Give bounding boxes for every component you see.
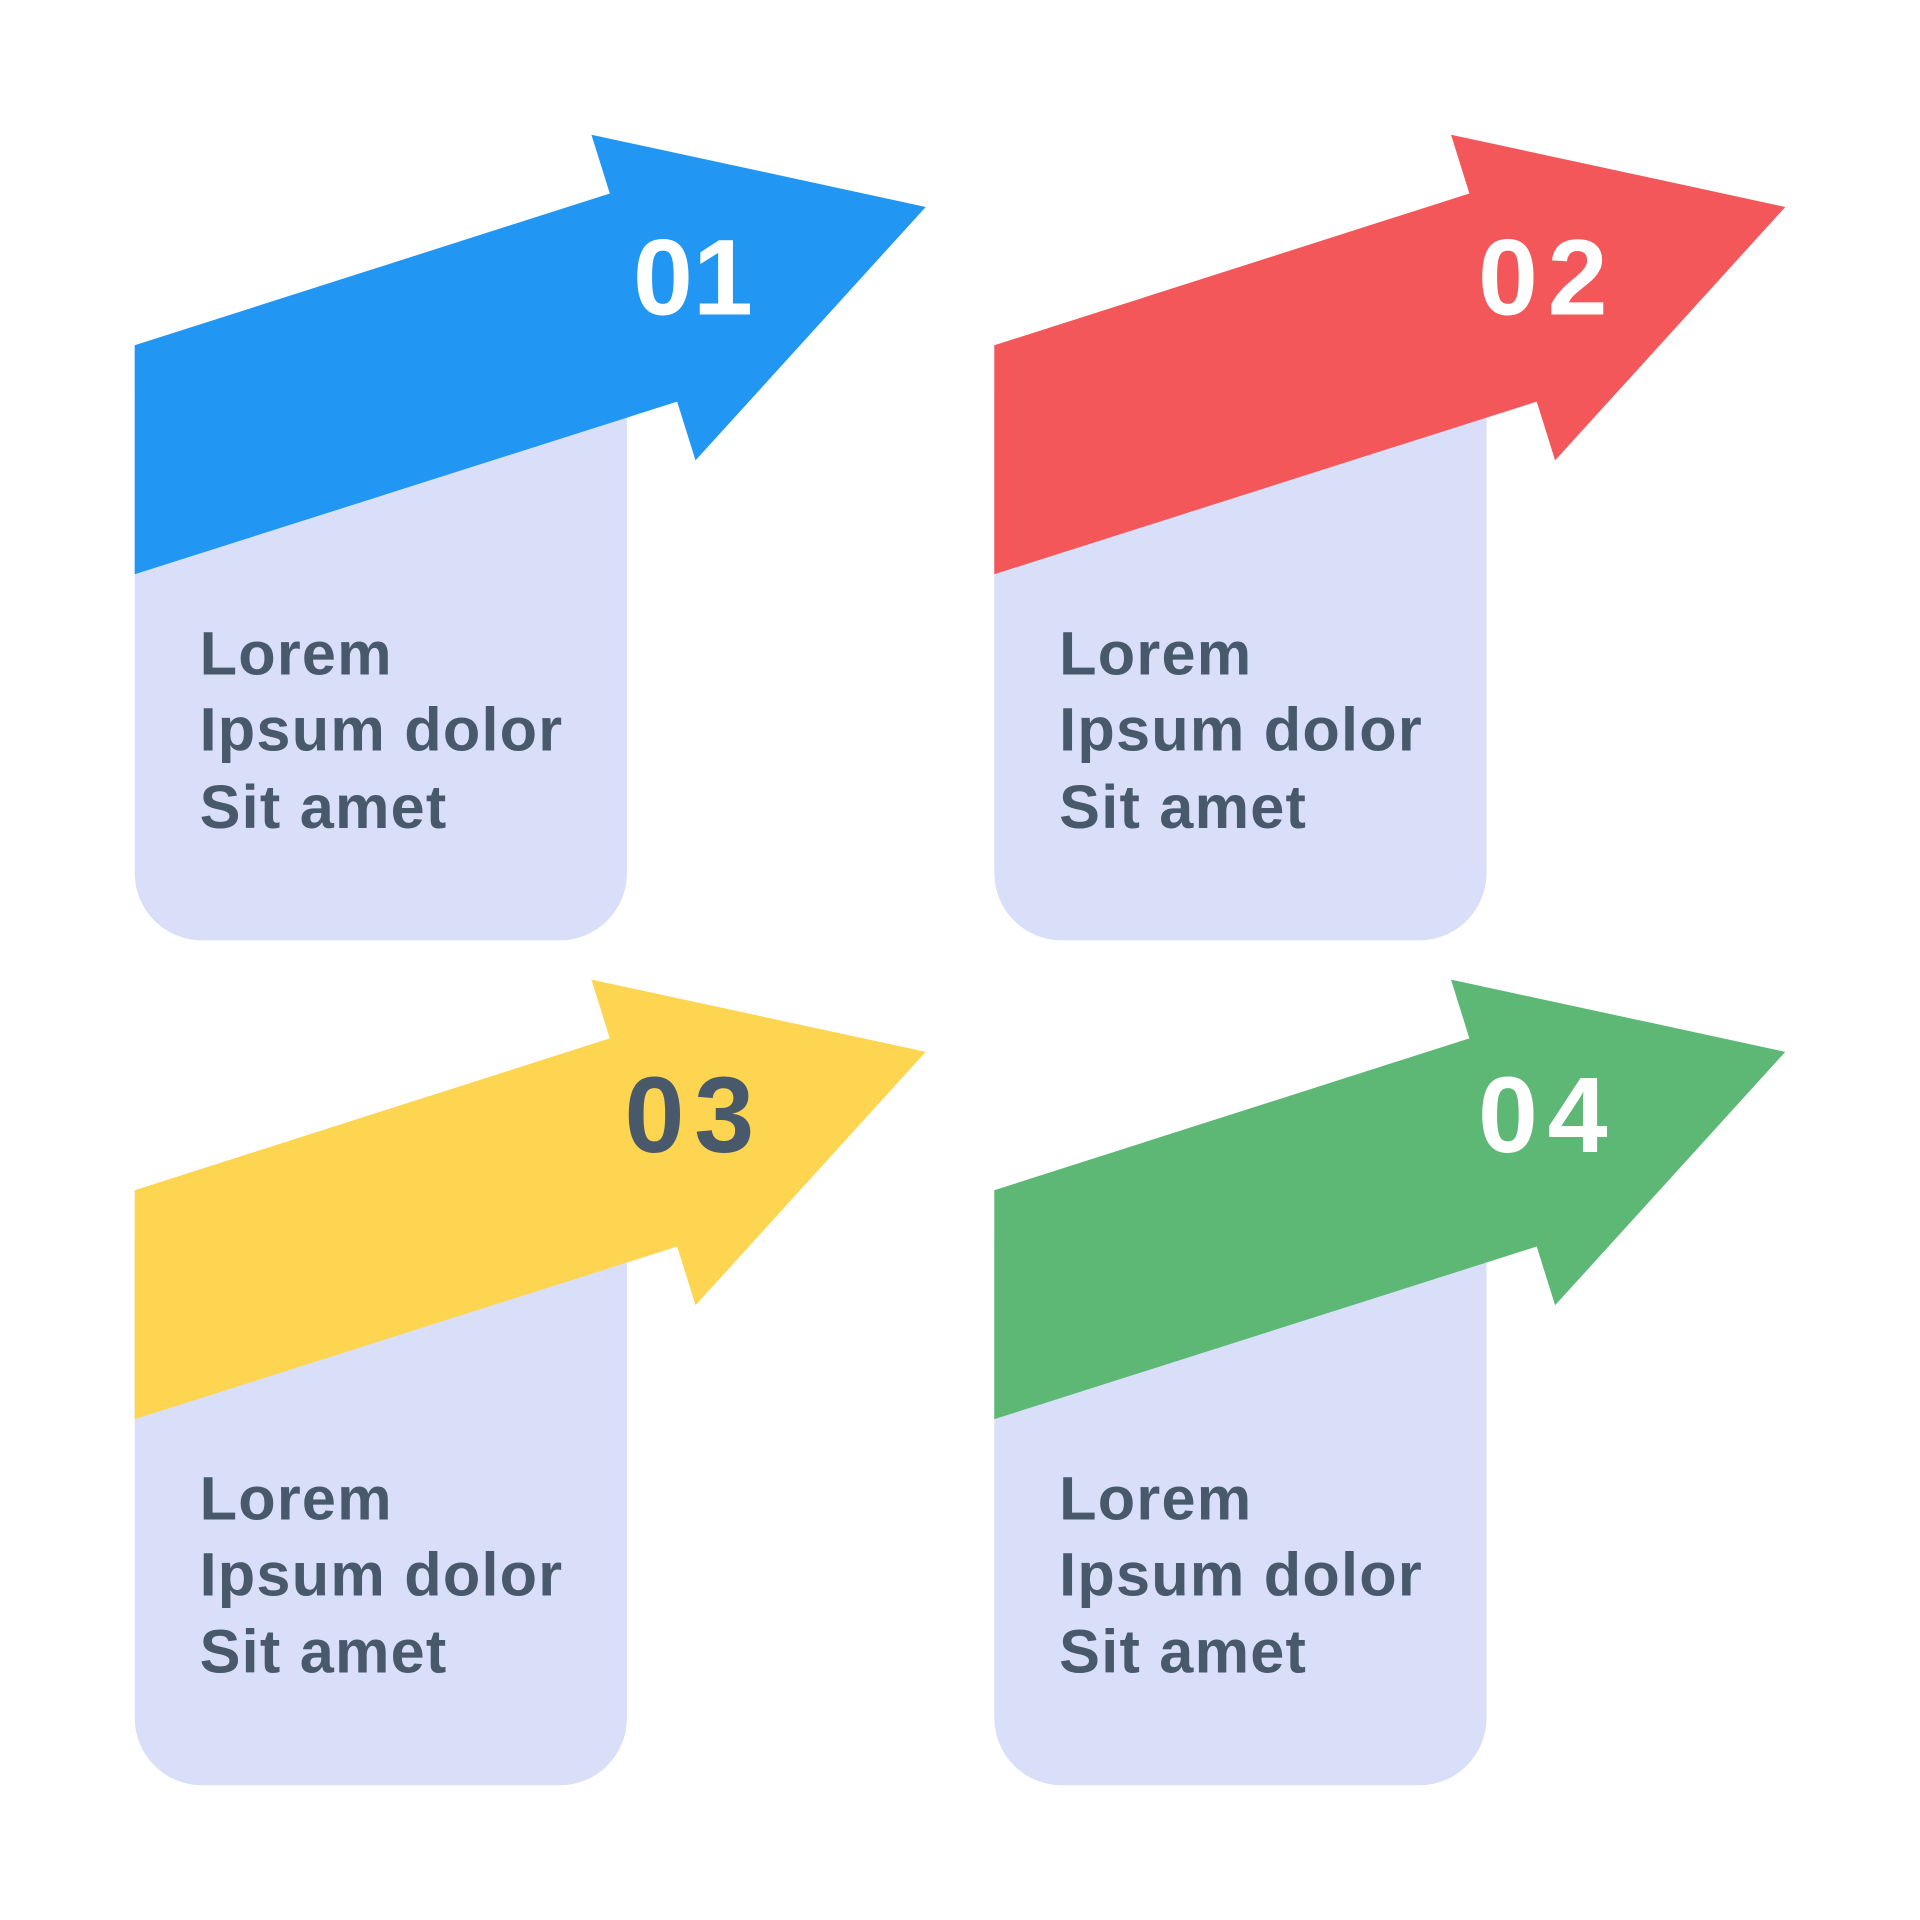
text 03: Sit amet: [200, 1618, 448, 1686]
card 02: [994, 392, 1487, 940]
number 01: 01: [633, 217, 753, 338]
panel: step 01: [135, 135, 926, 940]
text 01: Ipsum dolor: [200, 696, 563, 764]
arrow 04: [994, 980, 1785, 1419]
text 04: Sit amet: [1059, 1618, 1307, 1686]
panel: step 04: [994, 980, 1785, 1785]
text 02: Sit amet: [1059, 773, 1307, 841]
card 04: [994, 1237, 1487, 1785]
arrow 03: [135, 980, 926, 1419]
text 01: Lorem: [200, 620, 393, 688]
arrow 02: [994, 135, 1785, 574]
card 03: [135, 1237, 627, 1785]
arrow 01: [135, 135, 926, 574]
panel: step 02: [994, 135, 1785, 940]
panel: step 03: [135, 980, 926, 1785]
card 01: [135, 392, 627, 940]
number 04: 04: [1478, 1054, 1617, 1175]
text 02: Lorem: [1059, 620, 1252, 688]
text 01: Sit amet: [200, 773, 448, 841]
text 02: Ipsum dolor: [1059, 696, 1423, 764]
number 02: 02: [1478, 217, 1617, 338]
number 03: 03: [624, 1054, 764, 1175]
text 04: Lorem: [1059, 1465, 1252, 1533]
text 04: Ipsum dolor: [1059, 1541, 1423, 1609]
text 03: Ipsum dolor: [200, 1541, 563, 1609]
text 03: Lorem: [200, 1465, 393, 1533]
